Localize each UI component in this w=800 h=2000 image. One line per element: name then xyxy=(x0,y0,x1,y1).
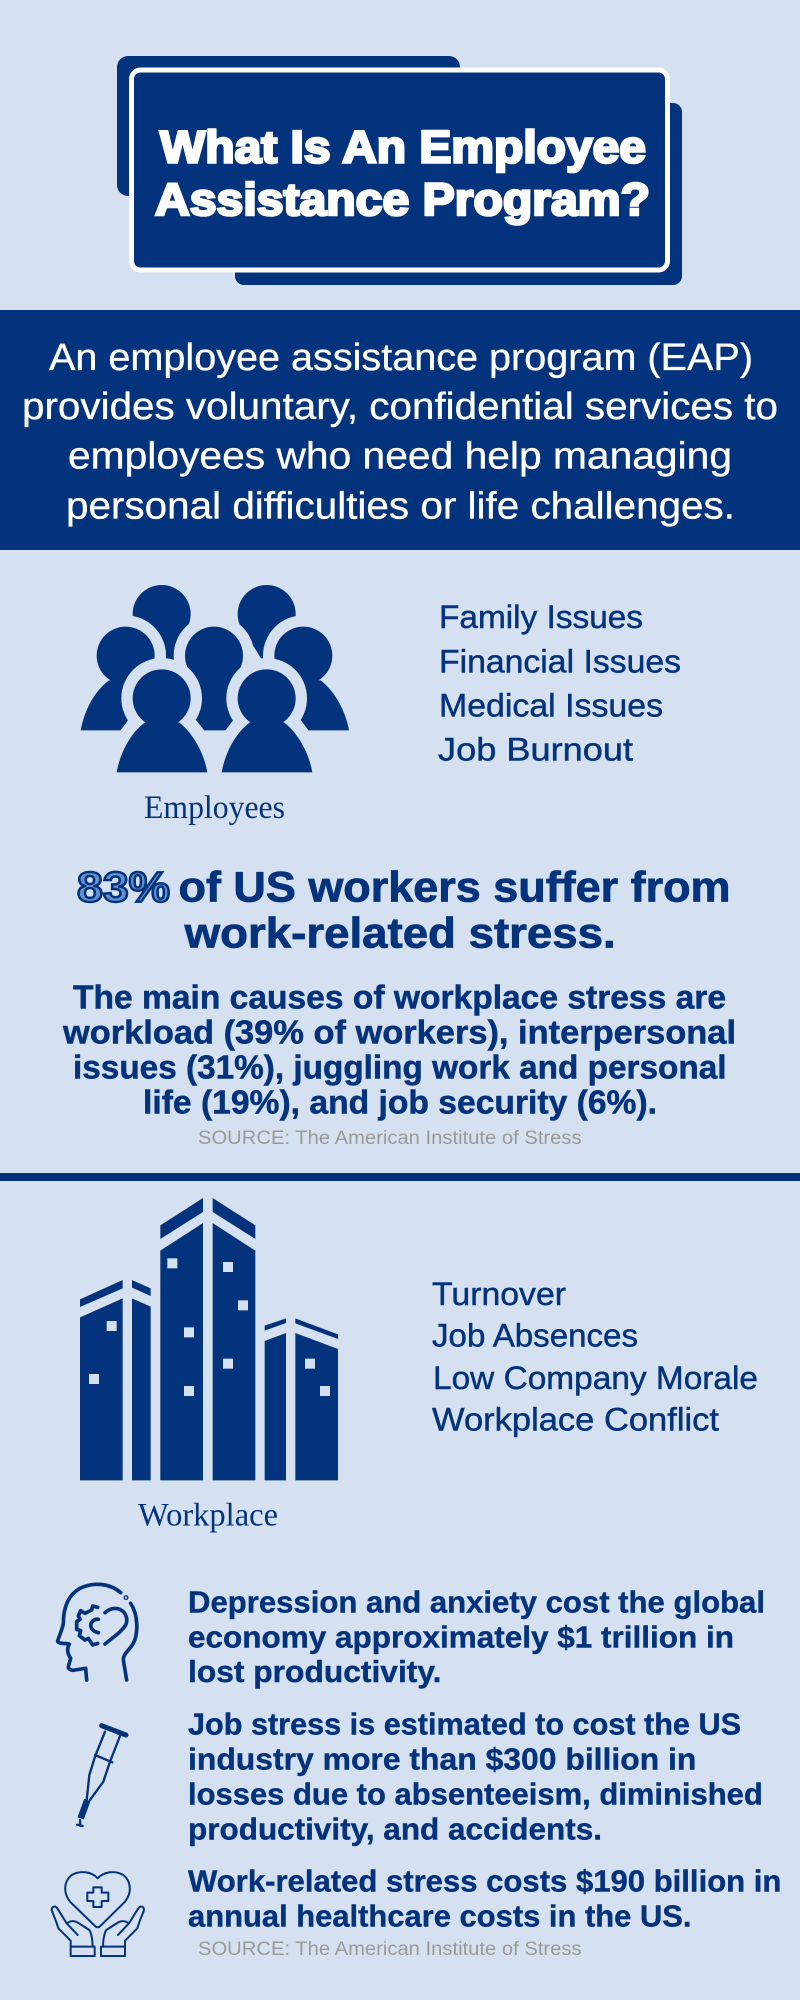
text: global cost: Depression and anxiety cost the global xyxy=(188,1585,765,1620)
title: What Is An Employee xyxy=(160,122,646,172)
text: main causes: issues (31%), juggling work and personal xyxy=(73,1048,726,1085)
stat heading: 83%: work-related stress. xyxy=(184,910,616,958)
list: employee issues: Medical Issues xyxy=(439,688,663,724)
definition text xyxy=(22,337,778,528)
text: US industry cost xyxy=(188,1706,763,1846)
definition text: personal difficulties or life challenges. xyxy=(66,486,735,528)
label: Workplace: Workplace xyxy=(138,1498,278,1534)
text: US industry cost: Job stress is estimated to cost the US xyxy=(188,1706,741,1741)
title xyxy=(155,122,650,225)
list: workplace issues: Low Company Morale xyxy=(433,1360,758,1396)
text: main causes xyxy=(62,978,736,1120)
list: employee issues: Family Issues xyxy=(439,599,643,635)
stat heading: 83%: of US workers suffer from xyxy=(178,864,730,912)
text: healthcare cost xyxy=(188,1864,781,1934)
text: global cost: lost productivity. xyxy=(188,1654,442,1689)
source note: SOURCE: The American Institute of Stress xyxy=(198,1128,582,1149)
definition text: employees who need help managing xyxy=(68,436,732,478)
list: workplace issues: Turnover xyxy=(432,1276,566,1312)
text: main causes: life (19%), and job security (6%). xyxy=(143,1083,657,1120)
icon: office buildings xyxy=(80,1198,338,1480)
source note: SOURCE: The American Institute of Stress xyxy=(198,1939,582,1960)
label: Employees: Employees xyxy=(144,790,285,826)
text: US industry cost: productivity, and accidents. xyxy=(188,1811,602,1846)
list: workplace issues: Job Absences xyxy=(432,1318,638,1354)
icon: crutch xyxy=(77,1726,126,1826)
definition text: An employee assistance program (EAP) xyxy=(49,337,753,379)
list: workplace issues xyxy=(432,1276,758,1438)
list: employee issues: Financial Issues xyxy=(439,644,681,680)
list: employee issues xyxy=(438,599,681,768)
text: global cost: economy approximately $1 trillion in xyxy=(188,1620,734,1655)
icon: hands holding heart xyxy=(52,1872,144,1956)
icon: employees group xyxy=(81,585,349,772)
text: healthcare cost: Work-related stress costs $190 billion in xyxy=(188,1864,781,1899)
stat heading: 83%: 83% xyxy=(77,864,170,912)
text: global cost xyxy=(188,1585,765,1689)
text: US industry cost: industry more than $300 billion in xyxy=(188,1741,696,1776)
list: workplace issues: Workplace Conflict xyxy=(432,1402,719,1438)
definition text: provides voluntary, confidential services to xyxy=(22,386,778,428)
icon: head with gear and heart xyxy=(58,1584,137,1680)
stat heading: 83% xyxy=(77,864,730,958)
title: Assistance Program? xyxy=(155,174,650,225)
text: main causes: workload (39% of workers), interpersonal xyxy=(62,1013,736,1050)
list: employee issues: Job Burnout xyxy=(438,732,633,768)
title box xyxy=(117,56,682,285)
text: US industry cost: losses due to absenteeism, diminished xyxy=(188,1776,763,1811)
text: main causes: The main causes of workplace stress are xyxy=(73,978,726,1015)
text: healthcare cost: annual healthcare costs in the US. xyxy=(188,1899,692,1934)
panel: EAP definition xyxy=(0,310,800,550)
